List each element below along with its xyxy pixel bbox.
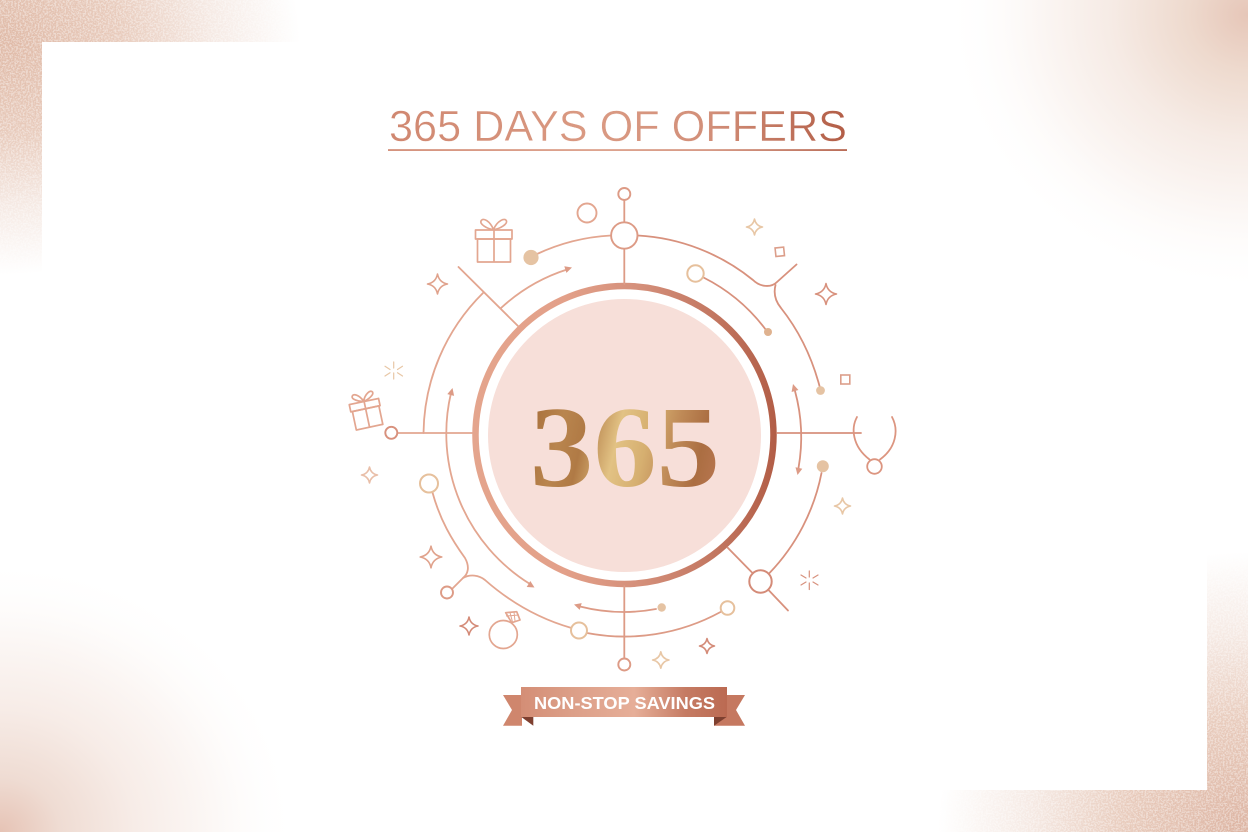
sparkles: gold	[653, 219, 850, 668]
ribbon left tail	[503, 695, 522, 726]
number 365: 365	[530, 384, 720, 512]
connector lines and arcs, centre column	[580, 200, 720, 658]
icon: diamond ring	[489, 612, 520, 648]
ribbon right fold	[714, 717, 727, 726]
ribbon banner	[503, 687, 745, 726]
nodes: open circles	[385, 188, 772, 670]
title underline	[388, 149, 847, 151]
icon: gift box	[476, 219, 512, 262]
connector lines and arcs, left side	[397, 236, 611, 628]
inner disc	[488, 299, 761, 572]
icon: necklace	[854, 417, 896, 474]
ribbon body	[521, 687, 727, 717]
central medallion	[476, 286, 774, 584]
title: 365 DAYS OF OFFERS	[389, 102, 847, 151]
small squares	[775, 247, 850, 384]
ribbon right tail	[714, 695, 745, 726]
icon: tilted gift box	[347, 390, 384, 430]
ribbon left fold	[521, 717, 533, 726]
burst: gold	[385, 362, 402, 379]
nodes: gold dots	[523, 250, 829, 612]
outer ring	[476, 286, 774, 584]
nodes: gold circles	[420, 265, 734, 638]
ribbon text: NON-STOP SAVINGS	[534, 693, 715, 713]
sparkles: rose	[362, 274, 836, 654]
connector lines and arcs, right side	[638, 236, 861, 610]
arrowheads	[447, 266, 802, 610]
burst: rose	[801, 571, 818, 590]
